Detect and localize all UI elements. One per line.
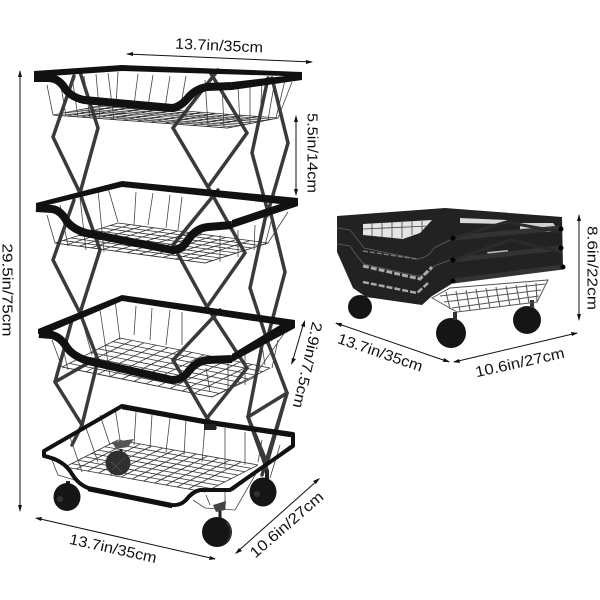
arrow and label: folded height [577, 214, 600, 321]
arrow and label: folded width: 13.7in/35cm [335, 330, 425, 376]
arrow and label: folded depth [453, 332, 578, 381]
tall cart, four tiers [34, 65, 302, 547]
tier 3 basket [38, 295, 295, 397]
wheels [54, 439, 276, 547]
wheel: front left [54, 481, 80, 511]
arrow and label: folded width [335, 323, 450, 376]
folded top opening [363, 218, 560, 258]
scissor legs [53, 70, 288, 475]
wheel: back left [106, 439, 134, 476]
folded cart wheels [348, 295, 541, 348]
folded scissor legs [450, 222, 566, 284]
tier 1 basket [34, 65, 302, 128]
folded stacked baskets body [337, 208, 563, 305]
arrow and label: bottom width: 13.7in/35cm [68, 531, 158, 567]
folded basket layer edges and gaps [337, 228, 450, 293]
arrow and label: bottom width [35, 517, 216, 567]
wheel: front right [250, 470, 276, 506]
arrow and label: tier spacing [294, 113, 320, 196]
arrow and label: top width: 13.7in/35cm [175, 36, 263, 56]
wheel: front [202, 501, 232, 547]
tier 4 basket [44, 406, 293, 510]
tier 2 basket [36, 181, 298, 263]
folded basket bottom wires [432, 280, 548, 312]
arrow and label: bottom depth: 10.6in/27cm [247, 488, 327, 562]
arrow and label: basket depth: 2.9in/7.5cm [289, 320, 325, 410]
arrow and label: folded height: 8.6in/22cm [584, 226, 600, 310]
folded cart [337, 208, 566, 348]
arrow and label: top width [126, 36, 313, 64]
arrow and label: tier spacing: 5.5in/14cm [304, 113, 320, 193]
arrow and label: bottom depth [235, 478, 327, 562]
arrow and label: total height [0, 70, 22, 512]
arrow and label: folded depth: 10.6in/27cm [474, 345, 566, 381]
